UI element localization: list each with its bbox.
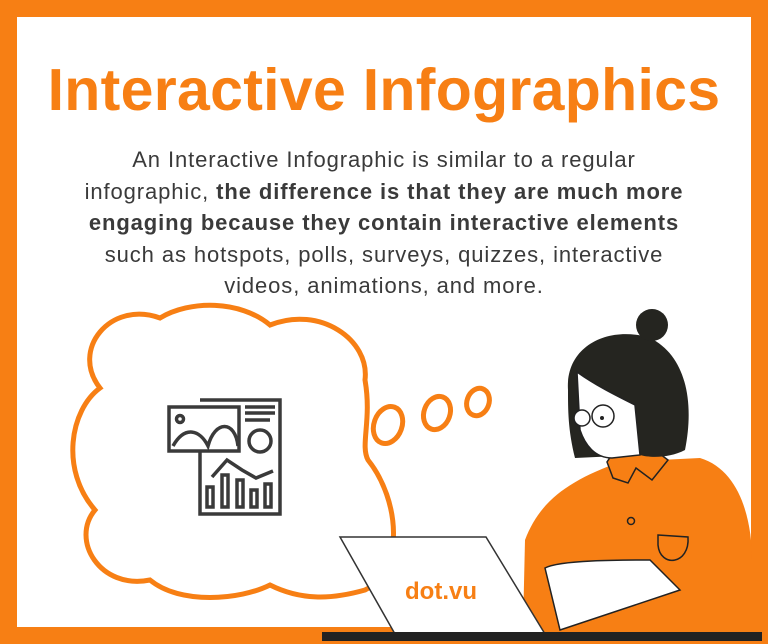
thought bubbles <box>368 402 408 448</box>
description text: infographic, the difference is that they are much more <box>85 178 683 204</box>
thought cloud <box>73 305 493 598</box>
description text <box>85 147 683 298</box>
laptop: dot.vu <box>405 578 477 605</box>
description text: such as hotspots, polls, surveys, quizzes, interactive <box>105 242 663 266</box>
icon: infographic document <box>169 400 280 514</box>
description text: An Interactive Infographic is similar to a regular <box>132 147 636 172</box>
laptop <box>340 537 545 634</box>
description text: engaging because they contain interactive elements <box>89 210 679 235</box>
title: Interactive Infographics <box>48 57 720 123</box>
woman <box>523 309 752 630</box>
description text: videos, animations, and more. <box>224 273 544 298</box>
desk bar <box>322 632 762 641</box>
